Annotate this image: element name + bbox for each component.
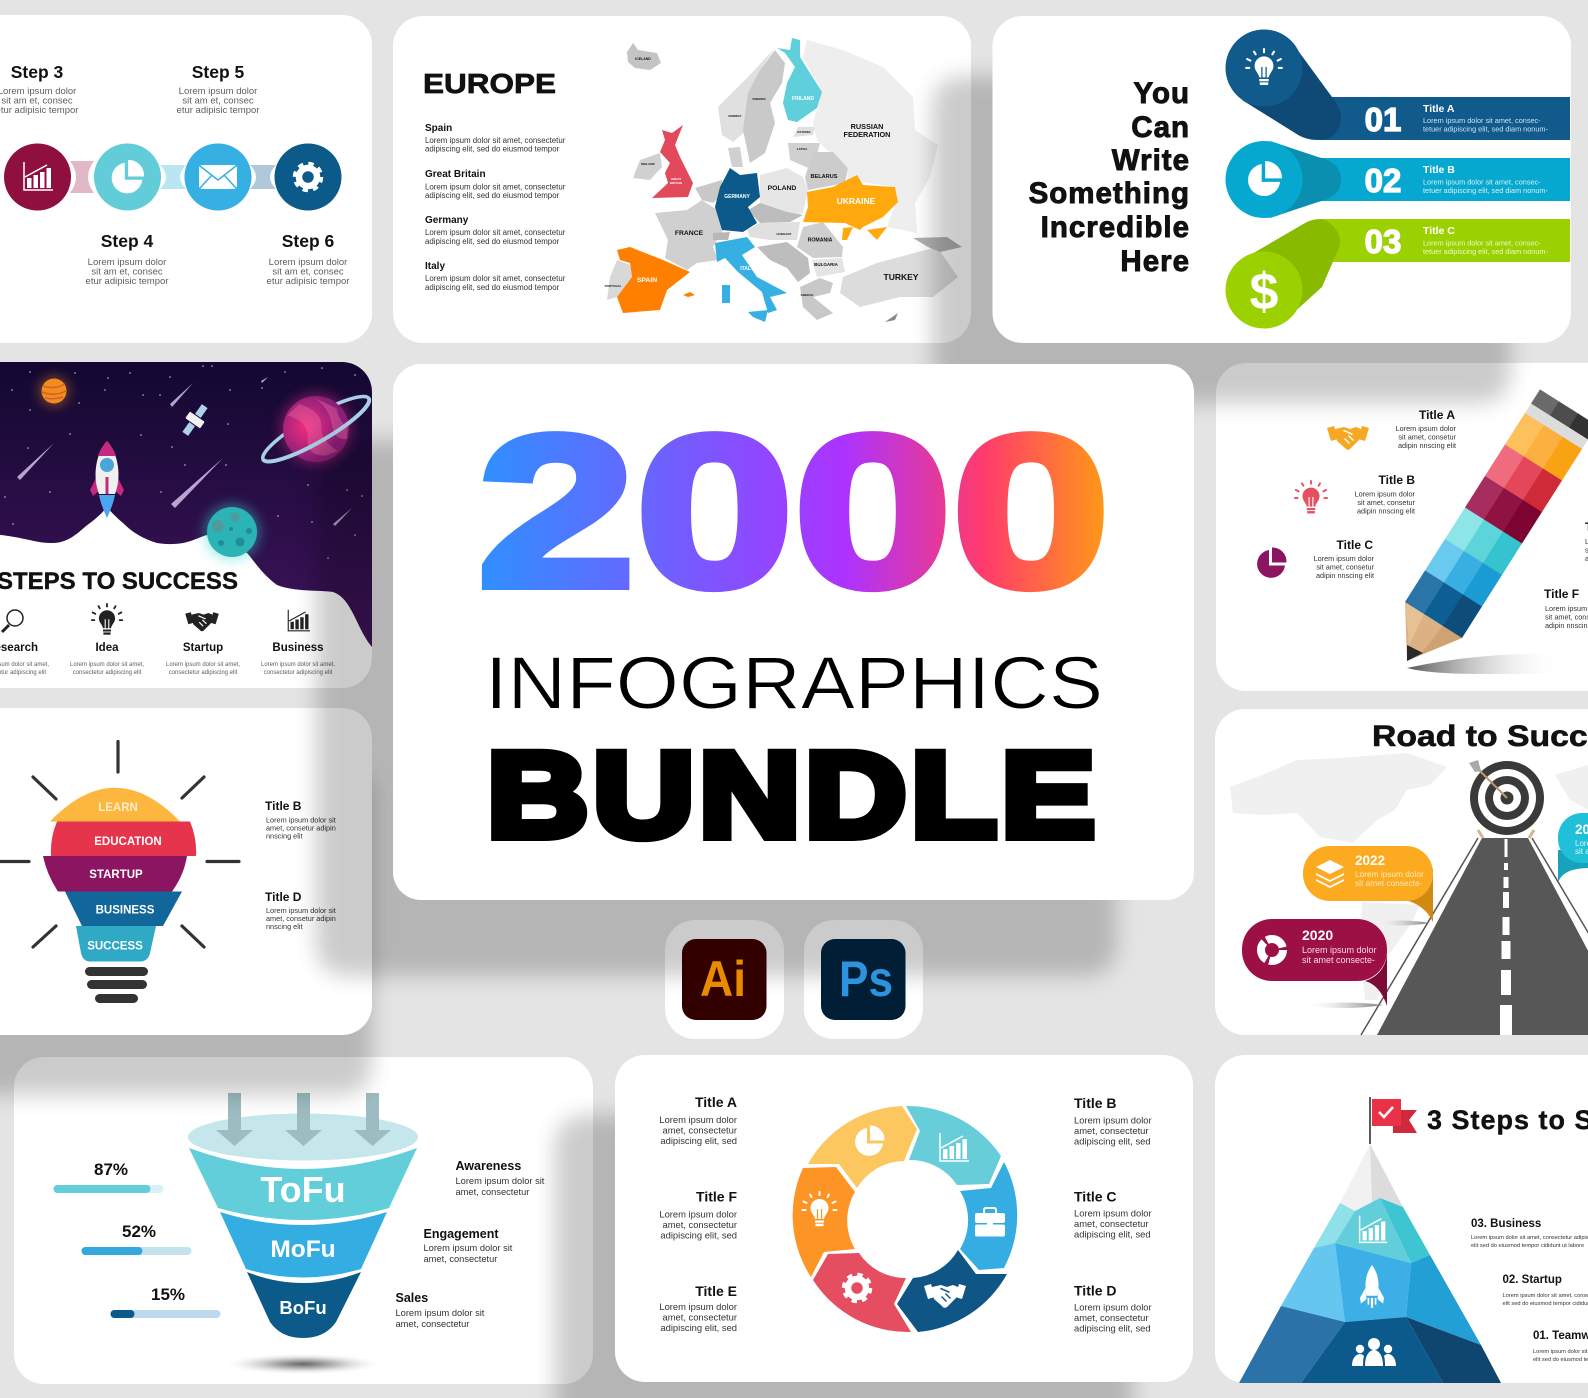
Europe country list: Lorem ipsum dolor sit amet, consectetur (425, 136, 566, 145)
title E text: adipiscing elit, sed (660, 1322, 737, 1333)
awareness text: Awareness (456, 1159, 521, 1173)
map labels: NORWAY (728, 114, 742, 118)
step 6 text: etur adipisic tempor (267, 276, 349, 287)
title A block (1327, 408, 1457, 450)
panel: cycle (615, 1055, 1193, 1382)
icon: Ai logo (682, 939, 766, 1020)
panel: ribbons (992, 16, 1571, 343)
ribbon 02: Title B (1423, 164, 1455, 176)
title D text: Lorem ipsum dolor sit (266, 906, 336, 915)
title A text: amet, consectetur (662, 1124, 737, 1136)
title: infographics: INFOGRAPHICS (485, 642, 1103, 724)
layer: learn: LEARN (98, 802, 138, 814)
title E text (659, 1283, 737, 1333)
panel: mountain three steps (1215, 1055, 1588, 1383)
title: 2000: 2000 (477, 390, 1110, 632)
shadow of panel: main title (316, 440, 1117, 976)
icon: rocket (90, 441, 124, 518)
item: idea (70, 604, 144, 676)
title F block (1544, 587, 1588, 630)
world map (1230, 753, 1588, 1000)
title C block (1257, 538, 1375, 580)
step 4 text: etur adipisic tempor (86, 276, 168, 287)
title C block: Title C (1337, 538, 1373, 552)
step 6 text (267, 231, 349, 287)
panel: steps timeline (0, 15, 372, 343)
step 4 text (86, 231, 168, 287)
ribbon 01 (1226, 30, 1570, 140)
funnel chart: MoFu (270, 1236, 336, 1263)
map labels: BRITAIN (670, 181, 682, 185)
ribbon headline: Can (1131, 111, 1190, 144)
title D text: Title D (1074, 1282, 1117, 1298)
funnel chart (188, 1114, 418, 1338)
title B text: adipiscing elit, sed (1074, 1136, 1151, 1146)
icon: Ps logo: Ps (839, 951, 893, 1007)
title B text: Lorem ipsum dolor (1074, 1114, 1152, 1126)
item: business: Business (272, 642, 324, 654)
planet: teal moon (204, 504, 260, 560)
title C text: Lorem ipsum dolor (1074, 1208, 1152, 1218)
bulb base (85, 967, 148, 1003)
map labels: GREECE (801, 293, 813, 297)
map labels: POLAND (768, 185, 796, 192)
item: business: Lorem ipsum dolor sit amet, (261, 662, 335, 668)
step 3 text: sit am et, consec (1, 96, 73, 106)
map labels: FINLAND (792, 96, 814, 102)
title A text: Lorem ipsum dolor (659, 1114, 737, 1125)
title E text: Lorem ipsum dolor (659, 1301, 737, 1312)
title A block: adipin nnscing elit (1398, 441, 1456, 450)
step 5 text (177, 62, 259, 116)
tile: Adobe Photoshop (804, 920, 923, 1039)
title B block: adipin nnscing elit (1357, 506, 1415, 516)
title F text (659, 1188, 737, 1240)
white landscape (0, 510, 372, 662)
planet: ringed (261, 386, 372, 472)
title F text: Title F (696, 1188, 737, 1204)
arrows into funnel (216, 1093, 391, 1146)
title E block (1585, 520, 1588, 563)
title B text (1074, 1095, 1152, 1146)
Europe country list: adipiscing elit, sed do eiusmod tempor (425, 283, 560, 292)
ribbon 01: 01 (1365, 101, 1401, 138)
step 5 text: Lorem ipsum dolor (179, 86, 257, 97)
Europe country list: adipiscing elit, sed do eiusmod tempor (425, 191, 560, 200)
road (1361, 838, 1588, 1035)
step 6 text: Step 6 (282, 231, 335, 251)
cycle diagram (793, 1106, 1017, 1332)
item: business: consectetur adipiscing elit (264, 670, 333, 676)
callout: 2022: sit amet consecte- (1355, 878, 1423, 888)
ribbon 02: 02 (1365, 162, 1401, 199)
panel: pencil (1216, 363, 1588, 691)
item: startup (166, 612, 240, 676)
map labels: BULGARIA (814, 262, 839, 267)
item: research (0, 610, 49, 676)
ribbon 02: Lorem ipsum dolor sit amet, consec- (1423, 178, 1541, 186)
pencil illustration (1405, 389, 1588, 661)
tile: Adobe Illustrator (665, 920, 784, 1039)
title F text: amet, consectetur (662, 1219, 737, 1230)
sales text: Lorem ipsum dolor sit (396, 1308, 485, 1318)
ribbon 03: 03 (1365, 223, 1401, 260)
map labels: ICELAND (635, 57, 651, 61)
map labels: HUNGARY (776, 232, 792, 236)
ribbon 03: Title C (1423, 225, 1455, 237)
layer: success: SUCCESS (87, 940, 143, 952)
title A text: Title A (695, 1094, 737, 1110)
title F text: adipiscing elit, sed (660, 1230, 737, 1240)
Europe country list (425, 123, 566, 292)
heading: steps to success: STEPS TO SUCCESS (0, 568, 238, 595)
layer: learn (50, 788, 180, 822)
map labels: ROMANIA (808, 238, 833, 244)
Europe country list: adipiscing elit, sed do eiusmod tempor (425, 144, 560, 154)
ribbon 03: Lorem ipsum dolor sit amet, consec- (1423, 238, 1541, 248)
awareness text: Lorem ipsum dolor sit (456, 1176, 545, 1186)
shadow of panel: cycle (555, 1115, 1133, 1398)
mountain (1239, 1144, 1501, 1383)
title D text (265, 890, 336, 931)
map labels: GREAT (671, 177, 681, 181)
step 5 text: etur adipisic tempor (177, 105, 259, 116)
step 02 text: 02. Startup (1502, 1274, 1562, 1286)
sales text: Sales (396, 1291, 428, 1305)
title D text: amet, consetur adipin (266, 914, 336, 923)
callout: 2022: 2022 (1355, 853, 1385, 868)
ribbon 01: Title A (1423, 103, 1455, 115)
title: bundle: BUNDLE (487, 727, 1100, 862)
title D text: amet, consectetur (1074, 1312, 1149, 1323)
icon: Ai logo: Ai (700, 951, 746, 1007)
Europe country list: Lorem ipsum dolor sit amet, consectetur (425, 182, 566, 192)
step 03 text: elit sed do eiusmod tempor cididunt ut labore (1471, 1243, 1584, 1249)
awareness text (456, 1159, 545, 1197)
title E text: Title E (695, 1283, 737, 1299)
item: startup: Lorem ipsum dolor sit amet, (166, 662, 240, 668)
sales text: amet, consectetur (396, 1319, 469, 1329)
engagement text: amet, consectetur (424, 1254, 497, 1264)
funnel shadow (221, 1353, 385, 1375)
step 01 text (1533, 1330, 1588, 1363)
sales text (396, 1291, 485, 1329)
step 4 text: Step 4 (101, 231, 154, 251)
pencil shadow (1407, 654, 1560, 674)
title D text: Title D (265, 890, 302, 904)
Europe country list: adipiscing elit, sed do eiusmod tempor (425, 237, 560, 246)
progress 15%: 15% (151, 1285, 185, 1304)
ribbon 02 (1226, 141, 1570, 218)
title B block: Lorem ipsum dolor (1355, 490, 1416, 498)
item: startup: consectetur adipiscing elit (169, 670, 238, 676)
step circle 5 (184, 144, 252, 210)
map labels: TURKEY (884, 272, 919, 282)
ribbon 03: tetuer adipiscing elit, sed diam nonum- (1423, 247, 1548, 256)
ribbon headline: Something (1029, 177, 1190, 210)
map labels: ITALY (740, 266, 754, 272)
Europe country list: Italy (425, 261, 445, 272)
layer: education: EDUCATION (94, 836, 162, 848)
title D text: nnscing elit (266, 922, 303, 931)
title C text: amet, consectetur (1074, 1218, 1149, 1229)
planet: orange (39, 376, 69, 406)
title B text: amet, consectetur (1074, 1125, 1149, 1136)
awareness text: amet, consectetur (456, 1187, 529, 1197)
shadow of panel: bulb (0, 768, 372, 1095)
connector strip (70, 161, 276, 193)
callout: 2020 (1242, 919, 1387, 1008)
panel: space steps to success (0, 362, 387, 700)
title B text: Title B (265, 799, 302, 813)
title A block: sit amet, consetur (1398, 432, 1457, 442)
Europe country list: Great Britain (425, 169, 486, 180)
panel: road to success (1215, 709, 1588, 1035)
title B text: amet, consetur adipin (266, 824, 336, 832)
Europe country list: Lorem ipsum dolor sit amet, consectetur (425, 274, 566, 283)
title D text (1074, 1282, 1152, 1334)
title C block: sit amet, consetur (1316, 562, 1375, 572)
funnel chart: BoFu (279, 1297, 327, 1318)
callout: 2020: sit amet consecte- (1302, 955, 1375, 965)
progress 87%: 87% (94, 1160, 128, 1179)
title B block: sit amet, consetur (1357, 498, 1416, 507)
layer: education (51, 822, 196, 856)
Europe country list: Germany (425, 215, 469, 226)
title E text: amet, consectetur (662, 1312, 737, 1322)
map labels: UKRAINE (837, 196, 876, 206)
map labels (605, 57, 919, 297)
step circle 3 (4, 144, 71, 210)
title F text: Lorem ipsum dolor (659, 1208, 737, 1220)
engagement text: Lorem ipsum dolor sit (424, 1243, 513, 1253)
panel: Europe map (393, 16, 971, 343)
progress 52% (82, 1222, 192, 1255)
layer: startup (43, 856, 187, 892)
step 6 text: Lorem ipsum dolor (269, 257, 347, 268)
shadow of panel: ribbons (932, 76, 1511, 403)
step 4 text: sit am et, consec (91, 266, 163, 278)
ribbon 01: tetuer adipiscing elit, sed diam nonum- (1423, 124, 1548, 134)
icon: flag (1370, 1097, 1417, 1144)
ribbon 03: $ (1250, 263, 1279, 321)
title B block (1295, 473, 1416, 516)
step circle 6 (274, 144, 342, 210)
title D text: Lorem ipsum dolor (1074, 1302, 1152, 1312)
map labels: SWEDEN (752, 97, 766, 101)
item: idea: Idea (95, 642, 119, 654)
icon: Ps logo (821, 939, 906, 1020)
ribbon 02: tetuer adipiscing elit, sed diam nonum- (1423, 186, 1548, 195)
ribbon headline: You (1133, 77, 1190, 110)
title A block: Title A (1419, 408, 1455, 422)
step 3 text: Step 3 (11, 62, 64, 82)
map labels: BELARUS (810, 174, 838, 180)
map labels: SPAIN (637, 277, 657, 284)
title B block: Title B (1379, 473, 1415, 487)
icon: target with arrow (1469, 760, 1544, 838)
title A text: adipiscing elit, sed (660, 1135, 737, 1146)
item: business (261, 610, 335, 676)
map of Europe (607, 32, 962, 322)
map labels: ESTONIA (797, 130, 811, 134)
map labels: GERMANY (724, 194, 750, 200)
progress 52%: 52% (122, 1222, 156, 1241)
map labels: IRELAND (641, 162, 655, 166)
ribbon headline: Incredible (1041, 211, 1190, 244)
step 02 text (1502, 1274, 1588, 1307)
title C text: Title C (1074, 1188, 1117, 1204)
layer: success (76, 926, 156, 962)
layer: business: BUSINESS (96, 904, 155, 916)
title B text: Lorem ipsum dolor sit (266, 816, 336, 824)
title C block: Lorem ipsum dolor (1314, 554, 1375, 563)
title C text: adipiscing elit, sed (1074, 1228, 1151, 1240)
map labels: FRANCE (675, 230, 704, 237)
item: startup: Startup (183, 642, 223, 654)
step 03 text (1471, 1218, 1588, 1249)
step 3 text: Lorem ipsum dolor (0, 86, 76, 97)
space illustration (0, 362, 372, 662)
progress 15% (110, 1285, 220, 1318)
ribbon 03 (1226, 219, 1570, 328)
map labels: PORTUGAL (605, 284, 622, 288)
title B text (265, 799, 336, 840)
title A block: Lorem ipsum dolor (1396, 424, 1457, 433)
callout: teal year (1558, 813, 1588, 883)
map labels: FEDERATION (844, 130, 890, 139)
ribbon 01: Lorem ipsum dolor sit amet, consec- (1423, 116, 1541, 125)
step circle 4 (94, 144, 161, 210)
item: idea: consectetur adipiscing elit (73, 670, 142, 676)
item: idea: Lorem ipsum dolor sit amet, (70, 662, 144, 668)
bulb rays (0, 742, 239, 947)
Europe country list: Spain (425, 123, 452, 134)
title F block: Title F (1544, 587, 1579, 601)
title B text: nnscing elit (266, 832, 303, 840)
ribbon headline: Write (1112, 144, 1190, 177)
progress 87% (54, 1160, 164, 1193)
title D text: adipiscing elit, sed (1074, 1322, 1151, 1334)
layer: business (65, 892, 182, 926)
ribbon headline: Here (1120, 245, 1190, 278)
step 5 text: sit am et, consec (182, 96, 254, 106)
step 6 text: sit am et, consec (272, 266, 344, 278)
callout: 2022: Lorem ipsum dolor (1355, 869, 1424, 879)
map labels: LATVIA (797, 147, 808, 151)
title B text: Title B (1074, 1095, 1117, 1111)
step 5 text: Step 5 (192, 62, 245, 82)
Europe country list: Lorem ipsum dolor sit amet, consectetur (425, 228, 566, 237)
callout: 2022 (1303, 846, 1433, 926)
title C block: adipin nnscing elit (1316, 571, 1374, 580)
step 03 text: 03. Business (1471, 1218, 1541, 1230)
callout: 2020: 2020 (1302, 927, 1333, 943)
funnel chart: ToFu (260, 1169, 346, 1210)
step 4 text: Lorem ipsum dolor (88, 257, 166, 268)
icon: satellite (182, 404, 208, 436)
panel: funnel (14, 1057, 593, 1384)
heading: Europe: EUROPE (423, 68, 556, 99)
layer: startup: STARTUP (89, 869, 143, 881)
step 3 text (0, 62, 78, 116)
panel: main title (393, 364, 1194, 900)
map labels: RUSSIAN (851, 122, 883, 131)
engagement text: Engagement (424, 1227, 499, 1241)
engagement text (424, 1227, 513, 1264)
panel: light bulb (0, 708, 372, 1035)
title A text (659, 1094, 737, 1146)
title C text (1074, 1188, 1152, 1240)
callout: 2020: Lorem ipsum dolor (1302, 945, 1377, 955)
